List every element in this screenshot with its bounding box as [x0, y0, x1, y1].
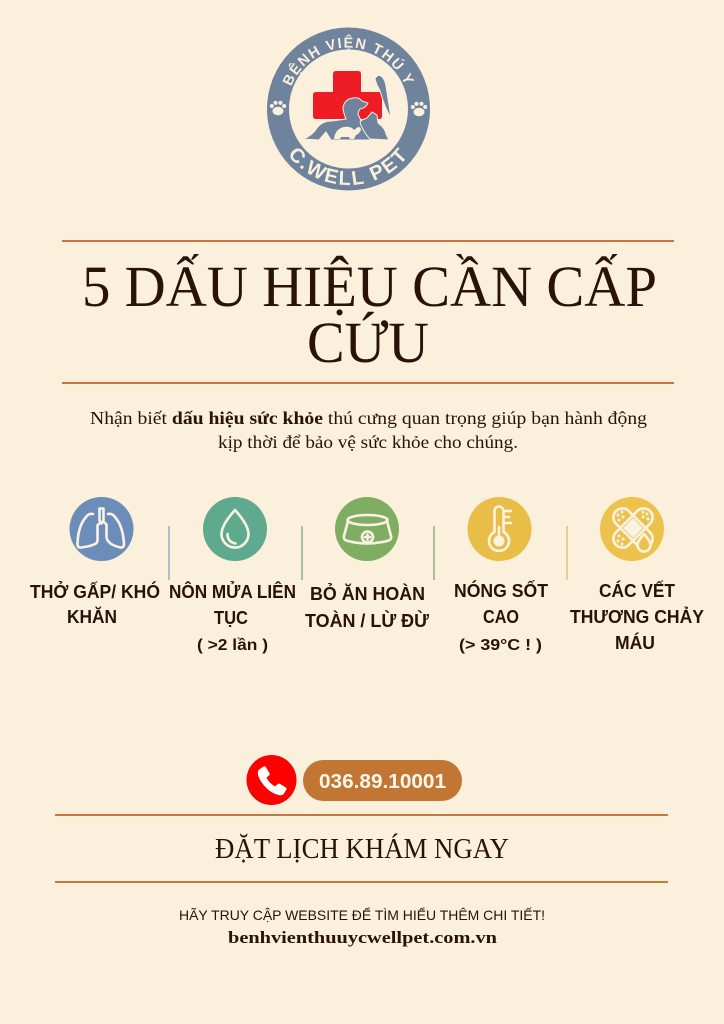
- label: TOÀN / LỪ ĐỪ: [305, 610, 429, 631]
- label: BỎ ĂN HOÀN: [310, 583, 425, 604]
- intro text: Nhận biết dấu hiệu sức khỏe thú cưng quan trọng giúp bạn hành động: [90, 408, 647, 428]
- logo top text: BỆNH VIỆN THÚ Y: [282, 34, 414, 86]
- label: THỞ GẤP/ KHÓ: [30, 581, 160, 602]
- icon: drop: [203, 497, 267, 561]
- sign 2: vomiting: [169, 497, 296, 654]
- label: [570, 580, 704, 653]
- icon: bandages: [600, 497, 664, 561]
- sign 5: bleeding wounds: [570, 497, 704, 653]
- title: 5 DẤU HIỆU CẦN CẤP: [82, 254, 657, 319]
- title: CỨU: [307, 310, 429, 375]
- divider: title top: [62, 240, 674, 242]
- label: (> 39°C ! ): [459, 637, 542, 654]
- phone number pill: [303, 760, 462, 801]
- label: ( >2 lần ): [197, 637, 268, 654]
- divider: cta top: [55, 814, 668, 816]
- label: [305, 583, 429, 631]
- label: CÁC VẾT: [599, 580, 675, 601]
- website url: benhvienthuuycwellpet.com.vn: [228, 928, 498, 947]
- divider: title bottom: [62, 382, 674, 384]
- icon: lungs: [70, 497, 134, 561]
- label: [169, 581, 296, 654]
- animals silhouette: [303, 75, 391, 140]
- icon: thermometer: [468, 497, 532, 561]
- cat: [360, 112, 389, 140]
- label: THƯƠNG CHẢY: [570, 606, 704, 627]
- sign 3: not eating: [305, 497, 429, 631]
- sign 1: breathing: [30, 497, 160, 627]
- website prompt: HÃY TRUY CẬP WEBSITE ĐỂ TÌM HIỂU THÊM CHI TIẾT!: [179, 906, 545, 923]
- label: [454, 580, 548, 654]
- logo: Bệnh viện thú y C.Well Pet: [267, 28, 430, 190]
- red cross: [313, 71, 382, 119]
- call to action: ĐẶT LỊCH KHÁM NGAY: [215, 834, 509, 865]
- parrot: [375, 75, 391, 118]
- icon: bowl: [335, 497, 399, 561]
- intro text: [90, 408, 647, 452]
- label: MÁU: [615, 632, 655, 653]
- divider: cta bottom: [55, 881, 668, 883]
- sign 4: fever: [454, 497, 548, 654]
- turtle: [334, 127, 361, 139]
- intro text: kịp thời để bảo vệ sức khỏe cho chúng.: [218, 432, 518, 452]
- label: NÔN MỬA LIÊN: [169, 581, 296, 602]
- icon: phone: [246, 755, 296, 805]
- label: [30, 581, 160, 627]
- label: NÓNG SỐT: [454, 580, 548, 601]
- dog: [303, 98, 390, 140]
- title: [82, 254, 657, 375]
- paw left: [270, 101, 286, 115]
- logo bottom text: C.WELL PET: [290, 147, 405, 186]
- phone number pill: 036.89.10001: [319, 771, 446, 793]
- label: TỤC: [214, 608, 248, 628]
- paw right: [411, 102, 427, 116]
- label: CAO: [483, 607, 519, 627]
- label: KHĂN: [67, 606, 117, 627]
